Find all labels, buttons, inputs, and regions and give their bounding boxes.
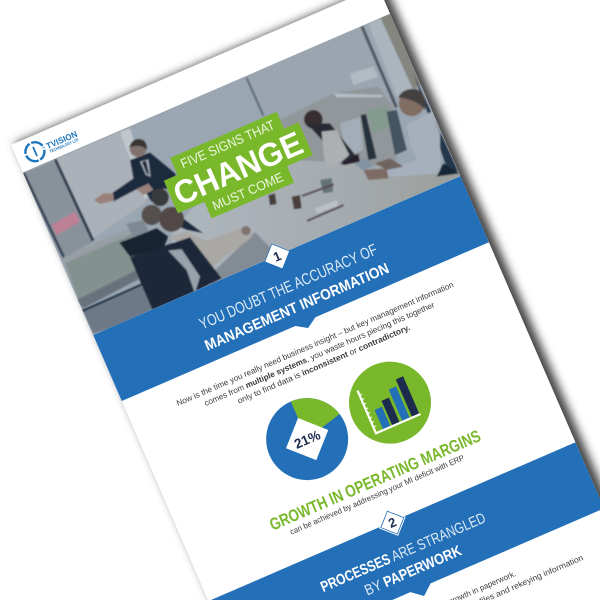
section 1 number badge xyxy=(260,239,294,274)
headline block: five signs that change must come xyxy=(156,105,320,230)
section 2 heading: BY PAPERWORK xyxy=(362,542,464,599)
section 2 number badge: 2 xyxy=(386,514,399,531)
growth callout: GROWTH IN OPERATING MARGINS xyxy=(267,426,484,534)
section 1 banner xyxy=(88,164,492,407)
headline block: five signs that change must come: MUST COME xyxy=(210,169,286,213)
section 2 heading: PROCESSES ARE STRANGLED xyxy=(318,510,488,596)
pie chart: 21% xyxy=(253,385,361,493)
section 1 body text: comes from multiple systems, you waste hours piecing this together xyxy=(203,300,436,408)
photo: woman, man on right and table items xyxy=(268,89,460,222)
section 2 body text xyxy=(281,542,585,600)
section 1 number badge: 1 xyxy=(271,248,283,265)
logo: TVision Technology Ltd: TVISION xyxy=(45,129,79,151)
section 1 heading: YOU DOUBT THE ACCURACY OF xyxy=(197,242,380,333)
growth callout: can be achieved by addressing your MI deficit with ERP xyxy=(289,453,466,537)
growth callout xyxy=(267,426,487,543)
headline block: five signs that change must come: FIVE SIGNS THAT xyxy=(178,117,277,171)
photo: presenter xyxy=(94,139,180,204)
photo: seated men and chairs xyxy=(119,189,252,320)
section 1 body text: Now is the time you really need business insight – but key management information xyxy=(175,280,455,408)
pie chart: 21%: 21% xyxy=(292,427,323,452)
section 1 heading: MANAGEMENT INFORMATION xyxy=(202,260,392,355)
section 1 body text: only to find data is inconsistent or contradictory. xyxy=(236,323,411,406)
photo: whiteboard and window xyxy=(23,128,152,334)
headline block: five signs that change must come: CHANGE xyxy=(168,124,308,212)
logo: TVision Technology Ltd: TECHNOLOGY LTD xyxy=(49,137,79,154)
photo: view through windows xyxy=(245,14,458,172)
section 2 number badge xyxy=(373,504,411,542)
icon: bar chart in green circle xyxy=(336,349,444,457)
section 2 banner xyxy=(203,430,600,600)
logo: TVision Technology Ltd xyxy=(23,125,81,164)
photo: table xyxy=(172,160,460,290)
photo: boardroom meeting xyxy=(0,0,600,400)
